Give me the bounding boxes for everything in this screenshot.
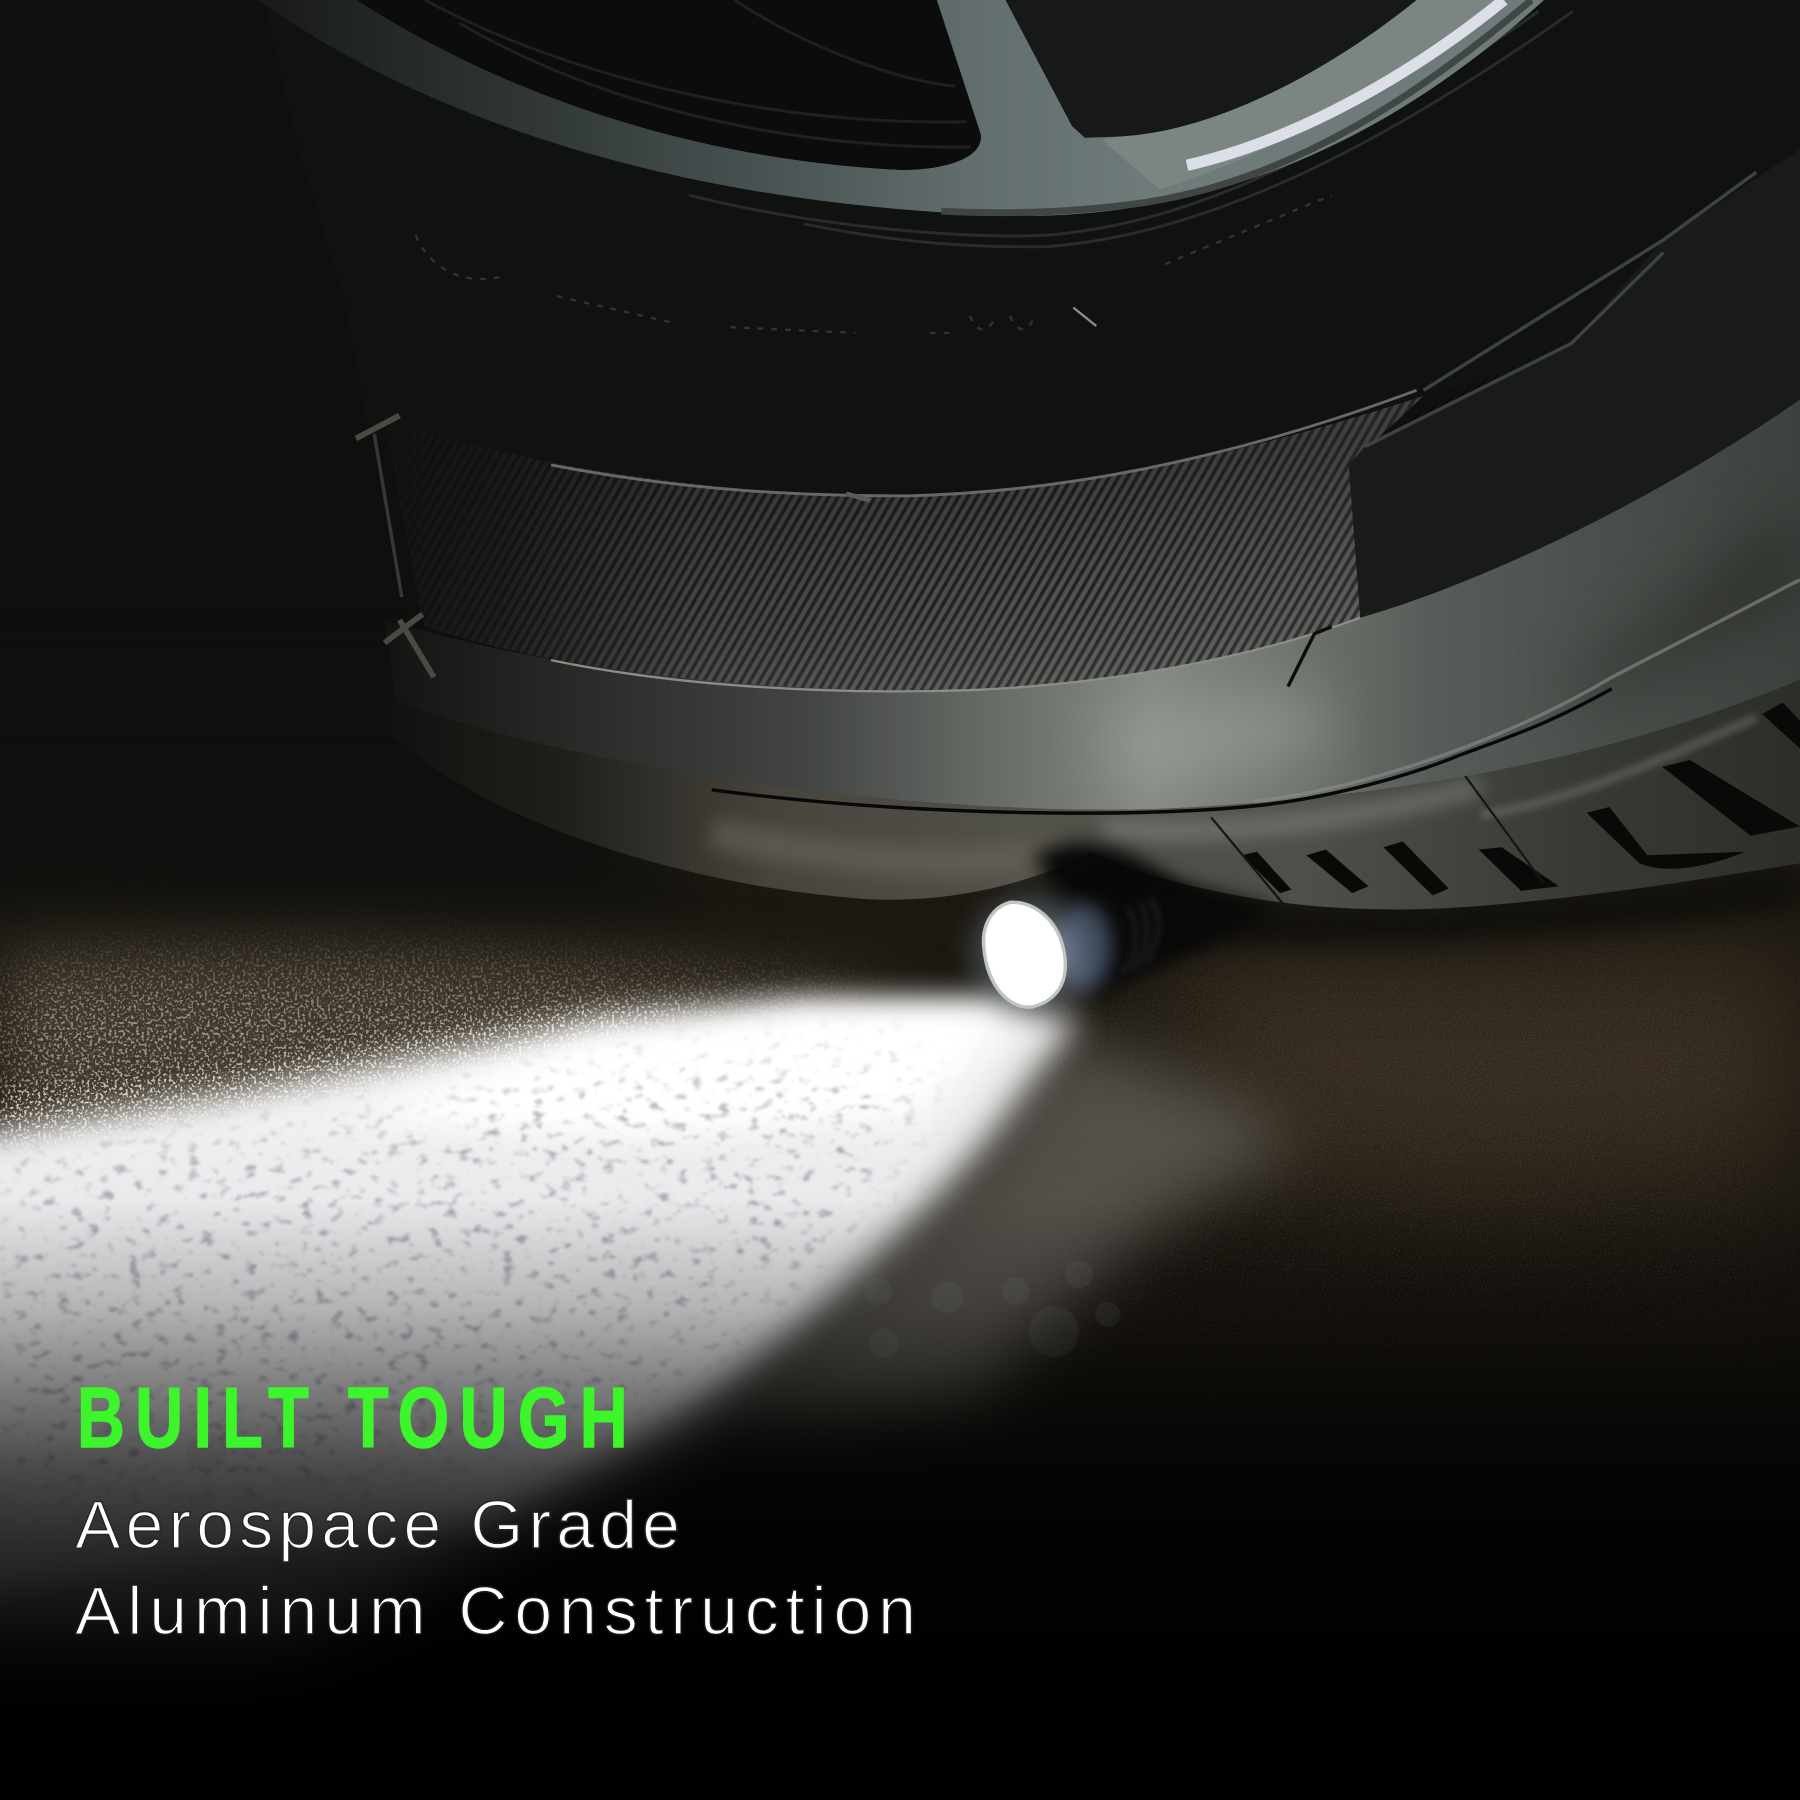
light beam on the ground [0,1001,1297,1653]
dark patch on right sidewall [1349,149,1800,618]
groove between shoulder and tread [712,689,1612,813]
flashlight [955,875,1274,1026]
shadow beneath tire [1102,886,1800,926]
speckled gravel lit by the beam edge [0,930,862,1150]
wheel rim [258,0,1573,247]
shoulder scuff highlight [1091,695,1343,786]
bottom fade to black [0,1200,1800,1800]
caption [75,1371,916,1649]
shoulder dark patch [1561,505,1800,700]
flashlight shadow [1062,875,1274,999]
tire mould flashing nubs [356,416,870,677]
sidewall lettering [416,195,1332,333]
wheel window right [1006,0,1417,138]
tire shoulder band [385,399,1800,810]
wheel window left [357,0,981,170]
tread highlights [1102,786,1481,831]
dark notch above flashlight [1033,843,1205,907]
tread seams [1211,769,1544,907]
window rings [425,0,971,147]
dark tire slit [1288,627,1332,686]
outer rim edge [941,0,1531,213]
lens [984,902,1065,1007]
subheading line one: Aerospace Grade [75,1487,680,1563]
body glow [1057,903,1112,991]
sidewall tick mark [1073,308,1096,326]
tread block slots [1242,703,1800,895]
ridge along groove [1255,580,1800,801]
ground surface [0,689,1800,1800]
sidewall ridges [1365,172,1756,447]
tire tread [390,677,1800,909]
hatched groove band [385,390,1423,691]
lens glow [955,879,1111,1026]
gravel base tone [0,949,918,1159]
heading: built tough: BUILT TOUGH [77,1371,628,1466]
subheading line two: Aluminum Construction [75,1573,916,1649]
bokeh spots [186,1260,1120,1473]
inner rim band [1102,0,1498,189]
upper tire sidewall [264,0,1800,505]
mould seam line [374,434,402,597]
bright rim lip [1187,0,1504,165]
rim ridges [689,11,1573,247]
knurled grip [1123,898,1158,973]
rim ring [258,0,1544,216]
